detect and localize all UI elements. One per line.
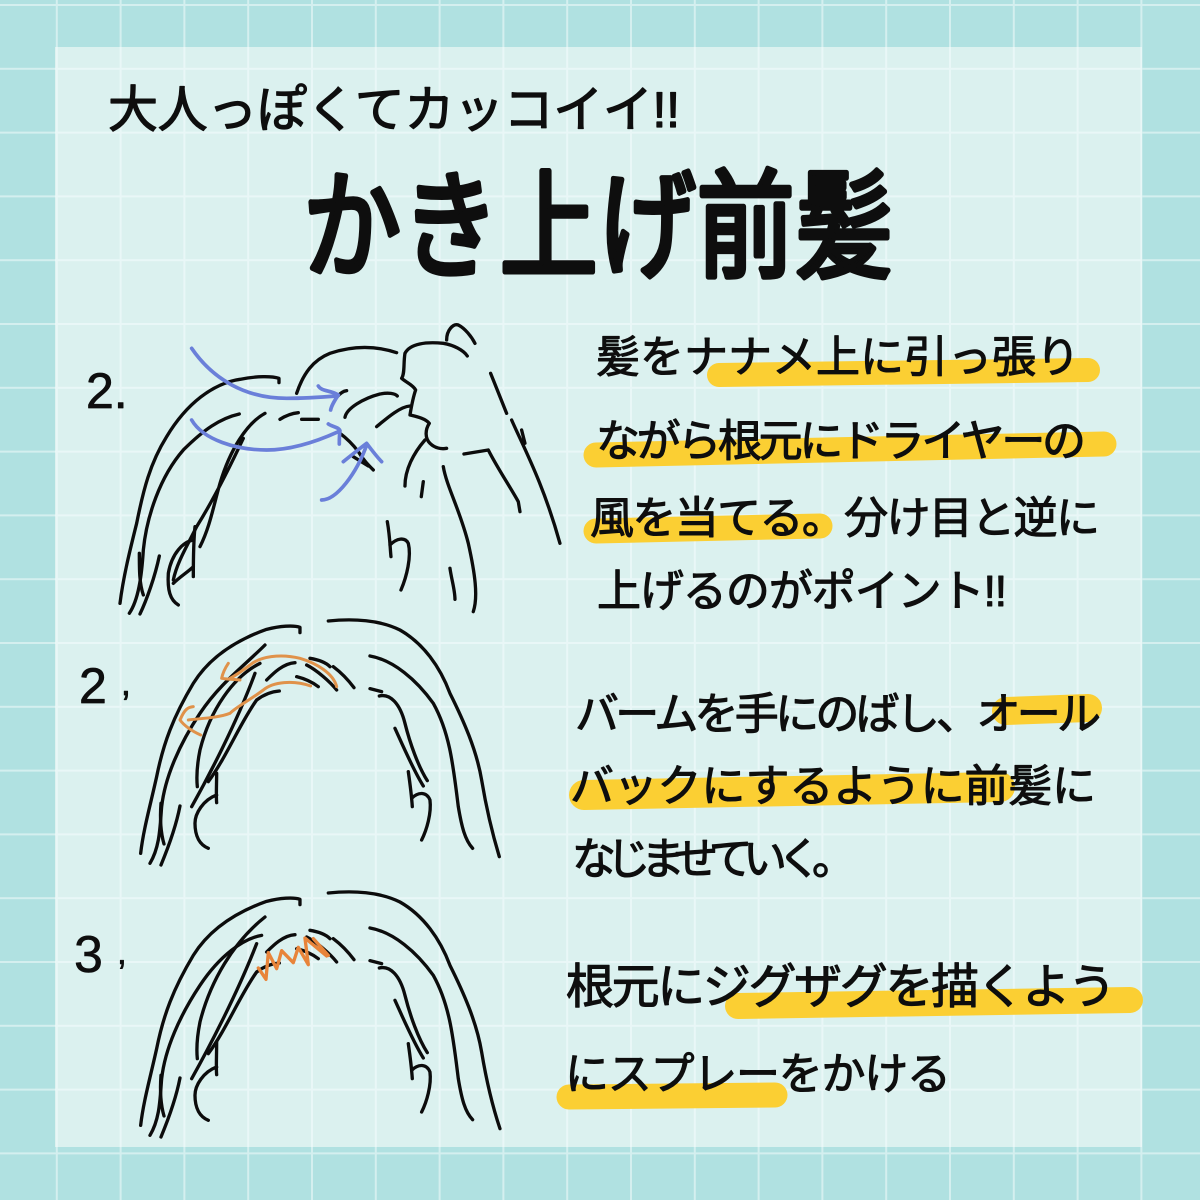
step 2 panel [79, 620, 1101, 884]
step 3 text [565, 961, 1116, 1099]
step 3 number: 3 [74, 926, 103, 984]
step 2 number: , [121, 662, 131, 703]
step 1 panel [86, 325, 1104, 616]
subtitle: 大人っぽくてカッコイイ!! [108, 82, 680, 138]
step 3 text: 根元にジグザグを描くよう [566, 961, 1116, 1014]
step 3 text: にスプレーをかける [565, 1050, 951, 1099]
step 3 panel [74, 892, 1130, 1137]
step 1 text: 風を当てる。分け目と逆に [590, 494, 1100, 543]
step 3 highlights [569, 1000, 1130, 1097]
step 2 text: なじませていく。 [572, 835, 856, 884]
step 2 text: バックにするように前髪に [570, 762, 1096, 811]
step 2 illustration: balm applied to bangs [141, 620, 499, 865]
step 1 text: 髪をナナメ上に引っ張り [596, 333, 1080, 382]
step 1 text: 上げるのがポイント!! [597, 567, 1007, 616]
step 2 highlights [584, 708, 1088, 795]
step 1 highlights [596, 370, 1104, 531]
step 1 text: ながら根元にドライヤーの [596, 417, 1086, 466]
step 2 number: 2 [79, 658, 107, 714]
step 3 number: , [117, 931, 127, 972]
step 1 number: 2. [86, 363, 128, 419]
step 3 illustration: spray in zigzag at roots [141, 892, 500, 1137]
step 2 text: バームを手にのばし、オール [575, 690, 1101, 739]
title: かき上げ前髪 [303, 162, 893, 293]
step 1 illustration: hair pulled diagonally up [120, 325, 560, 614]
step 1 text [590, 333, 1100, 616]
step 2 text [570, 690, 1101, 884]
